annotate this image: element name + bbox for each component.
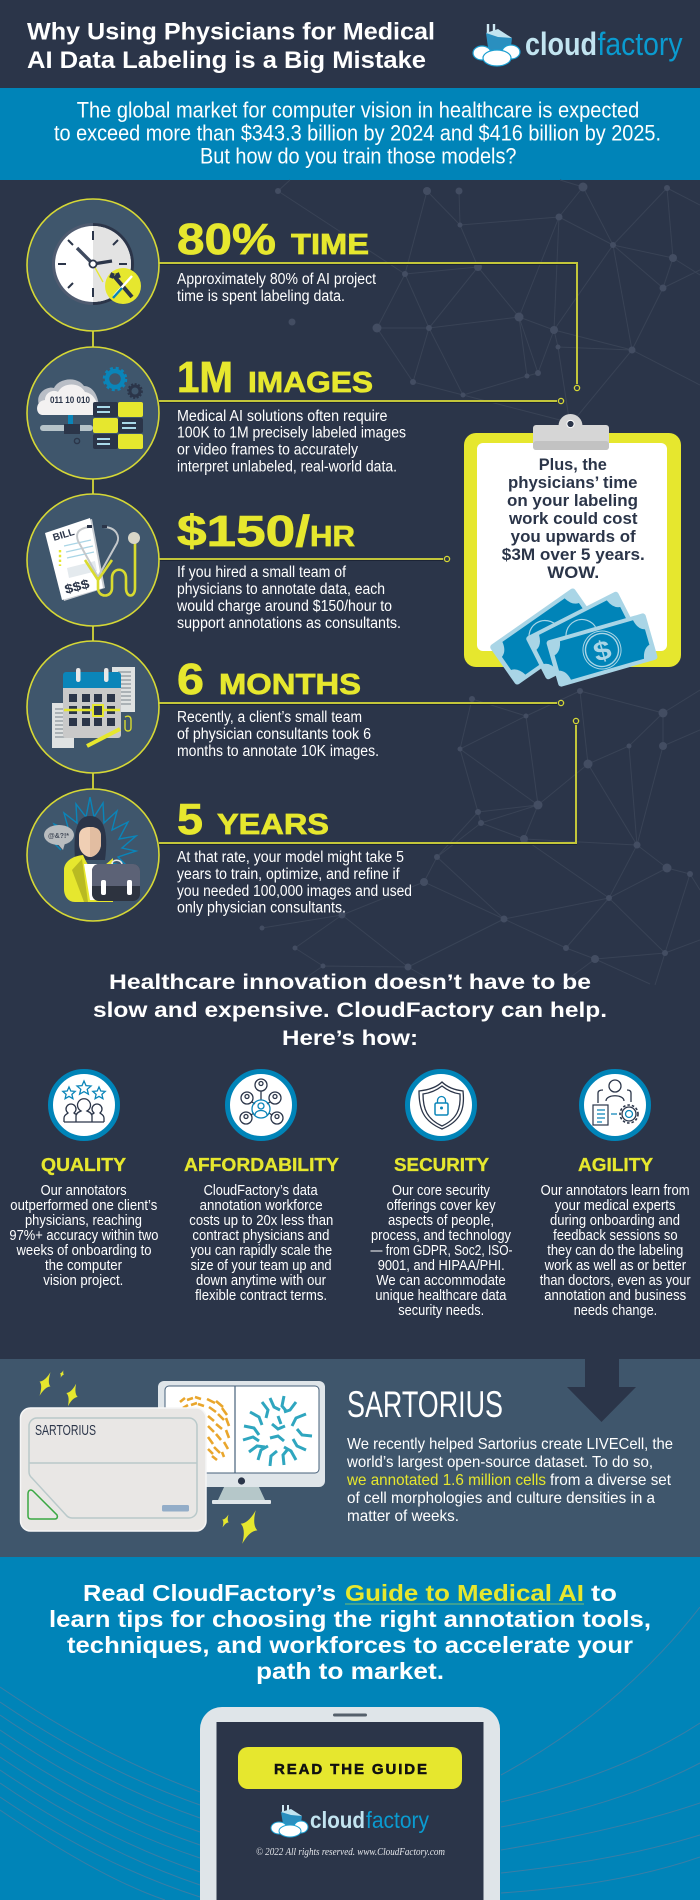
text block: of cell morphologies and culture densities in a xyxy=(347,1490,655,1507)
heading xyxy=(49,1580,651,1684)
callout text xyxy=(502,456,645,582)
clipboard clip xyxy=(533,414,609,450)
text block: would charge around $150/hour to xyxy=(176,598,392,615)
header xyxy=(27,18,682,74)
panel: security xyxy=(370,1072,513,1319)
button xyxy=(238,1747,462,1789)
icon: banknotes: $ xyxy=(590,634,615,668)
intro band xyxy=(0,88,700,180)
icon: bill and stethoscope: BILL xyxy=(52,527,76,544)
panel: $150/hr xyxy=(27,494,401,632)
text block: aspects of people, xyxy=(388,1213,494,1229)
text block: the computer xyxy=(45,1258,122,1274)
icon: annoyed physician with bag xyxy=(27,789,159,921)
icon: cloud and servers: 011 10 010 xyxy=(50,395,90,405)
logo: cloudfactory small: cloud xyxy=(310,1807,365,1833)
callout text: WOW. xyxy=(547,564,599,582)
text block: size of your team up and xyxy=(191,1258,332,1274)
logo: cloudfactory small: factory xyxy=(366,1807,429,1833)
callout text: physicians’ time xyxy=(508,474,638,492)
icon: shield with lock xyxy=(408,1072,474,1138)
text block: or video frames to accurately xyxy=(177,442,358,458)
text block: CloudFactory’s data xyxy=(204,1183,318,1199)
text block: outperformed one client’s xyxy=(10,1198,157,1214)
text block: time is spent labeling data. xyxy=(177,288,345,305)
label: QUALITY xyxy=(41,1155,126,1175)
text block: Recently, a client’s small team xyxy=(177,709,362,726)
text block xyxy=(177,408,406,476)
heading: 5 years xyxy=(177,795,329,844)
copyright: © 2022 All rights reserved. www.CloudFactory.com xyxy=(256,1847,445,1858)
icon: sample device: SARTORIUS xyxy=(35,1422,96,1439)
panel: 6 months xyxy=(27,641,379,773)
callout text: work could cost xyxy=(508,510,638,528)
tablet xyxy=(200,1707,500,1900)
text block: physicians, reaching xyxy=(25,1213,142,1229)
icon: calendar and papers xyxy=(27,641,159,773)
label: SECURITY xyxy=(394,1155,489,1175)
heading: $150/hr: HR xyxy=(310,521,355,553)
text block: 100K to 1M precisely labeled images xyxy=(177,424,406,442)
button: READ THE GUIDE xyxy=(274,1761,427,1778)
icon: cloud and servers xyxy=(27,347,159,479)
label: AFFORDABILITY xyxy=(184,1155,339,1175)
text block: interpret unlabeled, real-world data. xyxy=(177,458,397,476)
heading: path to market. xyxy=(256,1658,444,1684)
text block: flexible contract terms. xyxy=(195,1288,327,1304)
text block xyxy=(177,271,377,305)
icon: sample device xyxy=(20,1408,206,1531)
heading: $150/hr: $150/ xyxy=(177,507,310,556)
panel: agility xyxy=(540,1072,691,1319)
text block: We recently helped Sartorius create LIVECell, the xyxy=(347,1436,673,1453)
callout text: Plus, the xyxy=(539,456,607,474)
text block: during onboarding and xyxy=(550,1213,680,1229)
callout text: you upwards of xyxy=(511,528,636,546)
text block: your medical experts xyxy=(555,1198,675,1214)
text block: down anytime with our xyxy=(196,1273,326,1289)
heading: 80% time xyxy=(177,215,369,264)
heading: to xyxy=(591,1580,617,1606)
text block: matter of weeks. xyxy=(347,1508,459,1525)
title xyxy=(27,18,435,74)
text block: costs up to 20x less than xyxy=(189,1213,333,1229)
heading: $150/hr xyxy=(177,507,355,556)
text block: security needs. xyxy=(398,1303,484,1319)
intro band: The global market for computer vision in healthcare is expected xyxy=(77,97,639,122)
heading: 1M images: IMAGES xyxy=(248,367,373,399)
heading: 6 months: MONTHS xyxy=(219,669,361,701)
logo: cloudfactory: cloud xyxy=(525,26,597,62)
text block xyxy=(370,1183,513,1319)
text block: If you hired a small team of xyxy=(177,564,347,581)
panel: Sartorius case study xyxy=(0,1359,700,1557)
heading: 6 months: 6 xyxy=(177,655,204,704)
panel: 1M images xyxy=(27,347,406,479)
logo: cloudfactory small xyxy=(271,1805,429,1837)
icons: sparkles xyxy=(34,1370,264,1547)
text block xyxy=(540,1183,691,1319)
heading: 1M images: 1M xyxy=(177,353,233,402)
panel: call to action xyxy=(0,1557,700,1900)
text block: you can rapidly scale the xyxy=(191,1243,332,1259)
text block: from a diverse set xyxy=(550,1472,672,1489)
text block: 97%+ accuracy within two xyxy=(9,1228,158,1244)
callout text: $3M over 5 years. xyxy=(502,546,645,564)
heading: healthcare innovation xyxy=(93,970,607,1050)
text block: only physician consultants. xyxy=(177,900,346,916)
text block: We can accommodate xyxy=(376,1273,506,1289)
text block: unique healthcare data xyxy=(375,1288,507,1304)
text block: Medical AI solutions often require xyxy=(177,408,388,425)
icon: clock with tools xyxy=(27,199,159,331)
heading: 6 months xyxy=(177,655,361,704)
icon: banknotes xyxy=(489,587,658,687)
heading: healthcare innovation: slow and expensive. CloudFactory can help. xyxy=(93,998,607,1022)
text block xyxy=(177,709,379,760)
text block: Our core security xyxy=(392,1183,491,1199)
text block: we annotated 1.6 million cells xyxy=(346,1472,546,1489)
title: AI Data Labeling is a Big Mistake xyxy=(27,47,426,74)
text block: — from GDPR, Soc2, ISO- xyxy=(370,1243,513,1259)
text block: At that rate, your model might take 5 xyxy=(177,849,404,866)
text block xyxy=(346,1436,673,1525)
heading: 5 years: YEARS xyxy=(217,809,329,841)
icon: annoyed physician with bag: @&?!* xyxy=(48,833,69,840)
text block: weeks of onboarding to xyxy=(16,1243,152,1259)
text block: you needed 100,000 images and used xyxy=(177,883,412,900)
text block: offerings cover key xyxy=(387,1198,496,1214)
icon: bill and stethoscope: $$$ xyxy=(63,576,92,597)
logo: cloudfactory: factory xyxy=(598,26,682,62)
panel: affordability xyxy=(184,1072,339,1304)
title: Why Using Physicians for Medical xyxy=(27,18,435,45)
icon: connected people xyxy=(228,1072,294,1138)
text block xyxy=(9,1183,158,1289)
panel: 5 years xyxy=(27,789,412,921)
logo: Sartorius: SARTORIUS xyxy=(347,1384,503,1425)
text block: months to annotate 10K images. xyxy=(177,743,379,760)
text block: vision project. xyxy=(43,1273,123,1289)
heading: healthcare innovation: Here’s how: xyxy=(282,1026,418,1050)
text block: 9001, and HIPAA/PHI. xyxy=(378,1258,505,1274)
text block: process, and technology xyxy=(371,1228,512,1244)
text block: contract physicians and xyxy=(192,1228,329,1244)
heading: 80% time: 80% xyxy=(177,215,276,264)
text block: annotation workforce xyxy=(200,1198,323,1214)
connector lines to clipboard xyxy=(93,263,580,844)
text block: annotation and business xyxy=(544,1288,686,1304)
text block: Approximately 80% of AI project xyxy=(177,271,377,288)
text block xyxy=(176,564,401,632)
icon: bill and stethoscope xyxy=(27,494,159,626)
intro band: But how do you train those models? xyxy=(200,143,516,168)
panel: quality xyxy=(9,1072,158,1289)
heading: learn tips for choosing the right annotation tools, xyxy=(49,1606,651,1632)
icon: monitor with cell images xyxy=(158,1381,325,1504)
background network pattern xyxy=(260,180,700,985)
arrow xyxy=(567,1359,636,1422)
text block xyxy=(177,849,412,916)
label: AGILITY xyxy=(578,1155,653,1175)
icon: expert, document and gear xyxy=(582,1072,648,1138)
text block xyxy=(189,1183,333,1304)
heading: techniques, and workforces to accelerate your xyxy=(67,1632,633,1658)
text block: work as well as or better xyxy=(544,1258,686,1274)
text block: years to train, optimize, and refine if xyxy=(177,866,400,883)
heading: 80% time: TIME xyxy=(291,229,369,261)
background arcs xyxy=(0,1607,700,1900)
text block: needs change. xyxy=(574,1303,657,1319)
panel: 80% time xyxy=(27,199,377,331)
logo: cloudfactory xyxy=(473,24,682,66)
clipboard board xyxy=(464,433,681,667)
heading: Guide to Medical AI xyxy=(345,1580,584,1606)
text block: physicians to annotate data, each xyxy=(177,581,385,598)
heading: 5 years: 5 xyxy=(177,795,203,844)
panel: clipboard callout xyxy=(464,414,681,687)
text block: feedback sessions so xyxy=(553,1228,678,1244)
icon: stars and people xyxy=(50,1072,118,1138)
heading: Read CloudFactory’s xyxy=(83,1580,336,1606)
heading: 1M images xyxy=(177,353,373,402)
callout text: on your labeling xyxy=(507,492,638,510)
text block: world’s largest open-source dataset. To do so, xyxy=(346,1454,653,1471)
heading: healthcare innovation: Healthcare innovation doesn’t have to be xyxy=(109,970,591,994)
text block: of physician consultants took 6 xyxy=(177,726,371,743)
clipboard paper xyxy=(477,443,667,651)
text block: Our annotators xyxy=(41,1183,127,1199)
text block: they can do the labeling xyxy=(547,1243,683,1259)
text block: support annotations as consultants. xyxy=(177,615,401,632)
